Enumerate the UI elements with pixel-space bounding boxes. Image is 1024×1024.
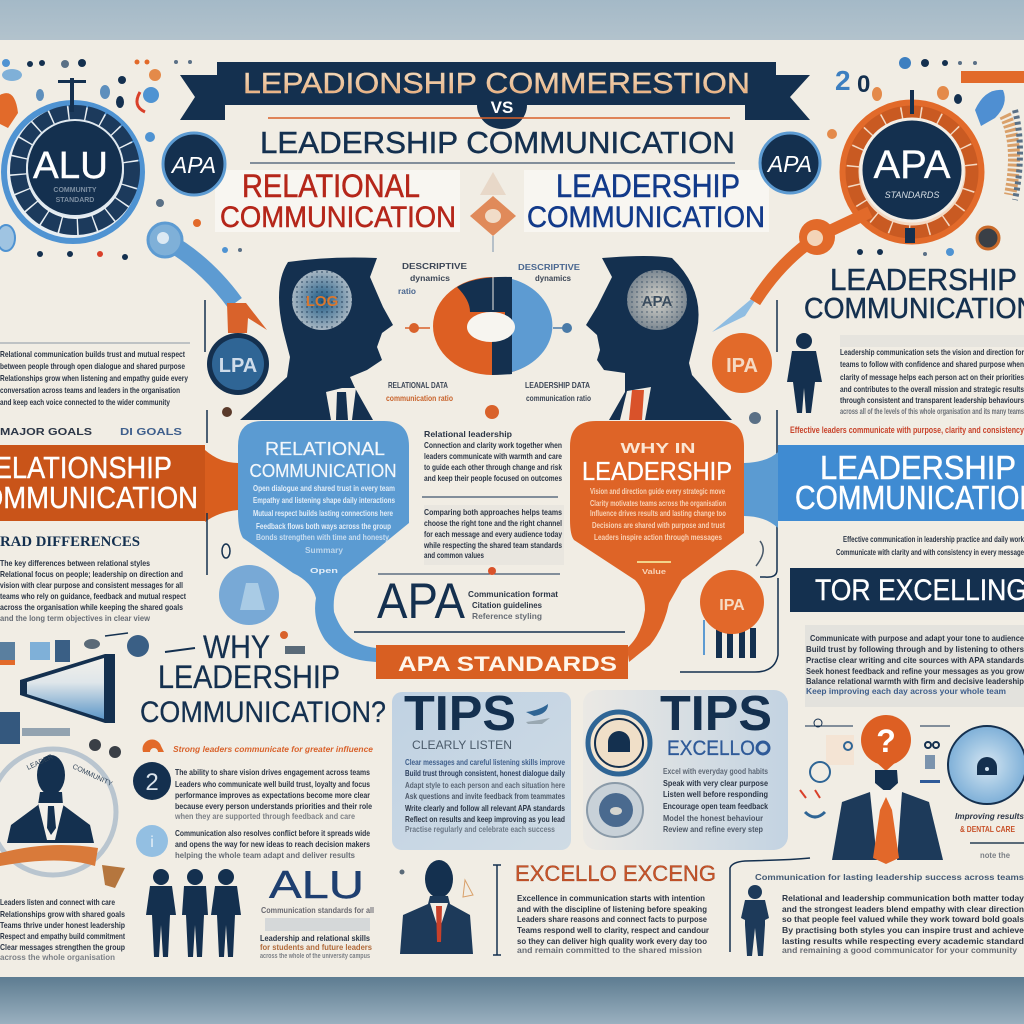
panel: right text <box>805 625 1024 707</box>
icon: orange disc with bars <box>680 410 778 672</box>
text block: centre lower: Comparing both approaches helps teams <box>424 507 562 517</box>
icon: standing person right <box>787 333 822 413</box>
text block: left differences: Relational focus on people; leadership on direction and <box>0 569 183 579</box>
labels around donut: ratio <box>398 287 416 296</box>
text block: bottom left: across the whole organisation <box>0 952 115 962</box>
text block: centre upper: Connection and clarity work together when <box>424 440 562 450</box>
labels around donut: communication ratio <box>526 394 591 403</box>
text block: right leadership <box>790 335 1024 435</box>
text block: left relational: MAJOR GOALS <box>0 427 92 438</box>
heading: relational communication red <box>215 168 460 234</box>
text block: reason two: performance improves as expectations become more clear <box>175 790 371 800</box>
text block: left differences: vision with clear purpose and consistent messages for all <box>0 580 183 590</box>
badge: right IPA disc: IPA <box>726 355 758 377</box>
icon: centre diamond <box>470 172 516 252</box>
icon: businessman with question mark <box>832 715 943 864</box>
silhouette: right head <box>586 256 732 420</box>
panel: tips left: Reflect on results and keep improving as you lead <box>405 814 565 824</box>
text block: reason two <box>174 767 372 821</box>
text block: reason three: helping the whole team adapt and deliver results <box>175 850 355 860</box>
brain icon right: APA <box>642 293 672 310</box>
text block: right small captions: note the <box>980 850 1010 860</box>
panel: tips left: TIPS <box>404 687 516 741</box>
text block: centre upper: Relational leadership <box>424 429 512 439</box>
banner: tor excelling <box>790 568 1024 612</box>
heading: leadership communication blue: LEADERSHIP <box>556 168 740 204</box>
heading: right leadership communication <box>804 262 1024 325</box>
banner: relationship communication <box>0 410 238 575</box>
vs text: VS <box>491 98 513 117</box>
badge: APA standards <box>843 90 981 243</box>
text block: excel <box>517 893 710 955</box>
text block: reason two: The ability to share vision drives engagement across teams <box>175 767 370 777</box>
heading: leadership communication blue: COMMUNICATION <box>527 201 765 234</box>
text block: left differences: and the long term objectives in clear view <box>0 613 150 623</box>
text block: centre lower: while respecting the shared team standards <box>423 540 562 550</box>
text block: right under banner <box>836 534 1024 557</box>
badge: leader portrait: LEADER <box>26 754 54 772</box>
heading: APA centre <box>377 573 558 629</box>
heading: excello exceng: EXCELLO EXCENG <box>515 861 716 886</box>
text block: ALU: across the whole of the university campus <box>260 953 370 960</box>
panel: tips right: Listen well before responding <box>663 789 768 799</box>
badge: left APA disc <box>207 333 269 395</box>
labels around donut: dynamics <box>410 274 451 283</box>
panel: tips right: Encourage open team feedback <box>663 801 768 811</box>
bubble: why in leadership: Value <box>642 569 666 576</box>
bubble: relational communication: COMMUNICATION <box>250 461 396 481</box>
panel: tips right: Review and refine every step <box>663 824 763 834</box>
badge: right IPA disc <box>712 333 772 393</box>
badge: APA standards: APA <box>873 143 951 187</box>
bubble: why in leadership: Decisions are shared with purpose and trust <box>592 520 725 530</box>
banner: leadership communication right <box>778 445 1024 521</box>
bubble: relational communication: Feedback flows both ways across the group <box>256 521 391 531</box>
text block: left differences <box>0 558 186 623</box>
text block: left relational: DI GOALS <box>120 427 182 438</box>
panel: tips right: EXCELLO <box>667 737 755 760</box>
text block: centre upper: leaders communicate with warmth and care <box>424 451 562 461</box>
labels around donut: DESCRIPTIVE <box>402 262 468 271</box>
icon: blue info circle <box>136 825 168 857</box>
text block: left differences: across the organisation while keeping the shared goals <box>0 602 183 612</box>
text block: ALU <box>260 905 374 960</box>
donut chart <box>405 277 572 375</box>
text block: bottom right: Communication for lasting leadership success across teams <box>755 872 1024 882</box>
panel: tips right: Model the honest behaviour <box>663 813 764 823</box>
heading: ALU bottom: ALU <box>269 864 364 907</box>
icons: scattered right top: 2 <box>835 65 851 96</box>
badge: APA small right <box>760 133 820 193</box>
text block: right small captions <box>955 811 1024 860</box>
text block: bottom right: so that people feel valued while they work toward bold goals <box>782 914 1024 924</box>
text block: centre lower: choose the right tone and the right channel <box>424 518 562 528</box>
text block: why orange header: Strong leaders communicate for greater influence <box>173 744 373 754</box>
heading: relational communication red: COMMUNICATION <box>220 201 456 234</box>
text block: centre lower <box>423 505 564 565</box>
labels around donut: LEADERSHIP DATA <box>525 381 590 390</box>
silhouette: left head <box>240 258 393 420</box>
badge: leader portrait: COMMUNITY <box>71 763 114 788</box>
heading: why leadership communication: COMMUNICATION? <box>140 696 386 729</box>
labels around donut: DESCRIPTIVE <box>518 263 581 272</box>
icons: scattered right top <box>827 57 1024 256</box>
heading: relational communication red: RELATIONAL <box>242 168 420 204</box>
text block: excel: Excellence in communication starts with intention <box>517 893 705 903</box>
bubble: why in leadership: Vision and direction guide every strategic move <box>590 486 725 496</box>
text block: bottom left: Leaders listen and connect with care <box>0 897 115 907</box>
banner: APA standards: APA STANDARDS <box>398 653 617 676</box>
badge: APA small left <box>163 133 225 195</box>
bubble: why in leadership: Clarity motivates teams across the organisation <box>590 498 726 508</box>
text block: left relational: Relationships grow when listening and empathy guide every <box>0 373 188 383</box>
bubble: why in leadership: WHY IN <box>620 440 696 457</box>
badge: APA standards: STANDARDS <box>885 190 939 200</box>
labels around donut: RELATIONAL DATA <box>388 381 448 390</box>
panel: tips right: TIPS <box>660 687 772 741</box>
heading: APA centre: APA <box>377 573 466 629</box>
text block: left differences: teams who rely on guidance, feedback and mutual respect <box>0 591 186 601</box>
icon: businessman with question mark: ? <box>876 723 896 759</box>
text block: left relational: conversation across teams and leaders in the organisation <box>0 385 180 395</box>
labels around donut <box>222 262 761 424</box>
text block: reason two: Leaders who communicate well build trust, loyalty and focus <box>175 779 370 789</box>
banner: leadership communication right: LEADERSHIP <box>820 449 1016 486</box>
heading: why leadership communication: LEADERSHIP <box>158 659 340 695</box>
panel: tips left: Ask questions and invite feedback from teammates <box>405 791 565 801</box>
text block: left relational: and keep each voice connected to the wider community <box>0 397 170 407</box>
text block: bottom left: Clear messages strengthen the group <box>0 942 125 952</box>
left icon row <box>0 631 305 665</box>
icon: businessman centre <box>400 860 501 955</box>
title ribbon <box>180 62 810 129</box>
brain icon right <box>627 270 687 330</box>
bubble: why in leadership: LEADERSHIP <box>582 456 732 486</box>
heading: why leadership communication: WHY <box>203 629 270 665</box>
icon: radar disc <box>948 726 1024 804</box>
bubble: relational communication: Bonds strengthen with time and honesty <box>256 532 389 542</box>
bubble: why in leadership <box>570 421 744 662</box>
text block: bottom left: Teams thrive under honest leadership <box>0 920 125 930</box>
text block: reason three: and opens the way for new ideas to reach decision makers <box>175 839 370 849</box>
text block: excel: Leaders share reasons and connect facts to purpose <box>517 914 707 924</box>
text block: reason two: when they are supported through feedback and care <box>174 811 355 821</box>
panel: right text: Keep improving each day across your whole team <box>806 686 1006 696</box>
text block: bottom right: Relational and leadership communication both matter today <box>782 893 1024 903</box>
heading: leadership communication blue <box>524 168 769 234</box>
badge: ALU: COMMUNITY <box>53 187 97 194</box>
bubble: relational communication: Open dialogue and shared trust in every team <box>253 483 395 493</box>
connector: right orange arm <box>712 212 870 352</box>
heading: APA centre: Reference styling <box>472 611 542 621</box>
text block: bottom left: Respect and empathy build commitment <box>0 931 125 941</box>
bubble: relational communication: Summary <box>305 545 343 555</box>
text block: reason two: because every person understands priorities and their role <box>175 801 372 811</box>
icon: orange disc with bars: IPA <box>719 597 745 614</box>
text block: reason three <box>175 828 370 860</box>
bubble: why in leadership: Leaders inspire action through messages <box>594 532 722 542</box>
bubble: why in leadership: Influence drives results and lasting change too <box>590 508 726 518</box>
heading: APA centre: Citation guidelines <box>472 600 542 610</box>
panel: tips left: Build trust through consistent, honest dialogue daily <box>405 768 565 778</box>
text block: excel: and remain committed to the shared mission <box>517 945 702 955</box>
icon: ring lens <box>588 712 650 774</box>
text block: left relational: between people through open dialogue and shared purpose <box>0 361 185 371</box>
text block: excel: and with the discipline of listening before speaking <box>517 904 707 914</box>
icon: blue info circle: i <box>150 834 154 851</box>
panel: tips left: Practise regularly and celebrate each success <box>405 824 555 834</box>
badge: left APA disc: LPA <box>219 355 257 377</box>
labels around donut: dynamics <box>535 274 572 283</box>
heading: why leadership communication <box>140 629 386 729</box>
text block: left relational: Relational communication builds trust and mutual respect <box>0 349 185 359</box>
connector: left blue arm <box>148 223 267 352</box>
title text: LEPADIONSHIP COMMERESTION <box>243 68 750 100</box>
icon: standing person in frame <box>730 858 810 956</box>
text block: centre upper <box>424 429 562 483</box>
brain icon left <box>292 270 352 330</box>
brain icon left: LOG <box>306 293 338 310</box>
panel: tips left: Write clearly and follow all relevant APA standards <box>405 803 565 813</box>
text block: why orange header <box>143 740 373 754</box>
text block: bottom left: Relationships grow with shared goals <box>0 909 125 919</box>
text block: excel: Teams respond well to clarity, respect and candour <box>517 925 710 935</box>
text block: excel: so they can deliver high quality work every day too <box>517 936 707 946</box>
text block: left relational <box>0 343 190 438</box>
bubble: relational communication: RELATIONAL <box>265 439 385 459</box>
badge: ALU: STANDARD <box>56 197 94 204</box>
connector: blue tab right <box>744 452 778 528</box>
panel: tips right: Excel with everyday good habits <box>663 766 768 776</box>
icon: grey lens <box>587 783 643 837</box>
heading: differences: RAD DIFFERENCES <box>0 534 140 550</box>
text block: bottom right: and the strongest leaders blend empathy with clear direction <box>782 904 1024 914</box>
panel: tips right <box>583 687 788 850</box>
heading: right leadership communication: LEADERSHIP <box>830 262 1017 297</box>
badge: APA small left: APA <box>170 152 216 178</box>
text block: bottom right: and remaining a good communicator for your community <box>782 945 1017 955</box>
text block: reason three: Communication also resolves conflict before it spreads wide <box>175 828 370 838</box>
bubble: relational communication: Mutual respect builds lasting connections here <box>253 508 393 518</box>
icons: scattered left top <box>0 59 242 260</box>
text block: ALU: Communication standards for all <box>261 905 374 915</box>
bubble: relational communication <box>238 421 409 662</box>
text block: centre lower: for each message and every audience today <box>424 529 562 539</box>
icon: number 2 <box>133 762 171 800</box>
icons: scattered right top: 0 <box>857 71 870 98</box>
icon: blue disc <box>219 544 279 625</box>
badge: leader portrait <box>0 749 125 888</box>
text block: ALU: for students and future leaders <box>260 943 373 952</box>
text block: ALU: Leadership and relational skills <box>260 933 370 943</box>
right icons around businessman <box>800 719 950 817</box>
panel: tips left: CLEARLY LISTEN <box>412 738 512 752</box>
text block: bottom right: By practising both styles you can inspire trust and achieve <box>782 925 1024 935</box>
panel: tips right: Speak with very clear purpose <box>663 778 768 788</box>
text block: bottom left <box>0 897 125 962</box>
banner: APA standards <box>376 645 628 679</box>
badge: ALU: ALU <box>33 145 108 187</box>
text block: bottom right <box>755 872 1024 955</box>
bubble: relational communication: Empathy and listening shape daily interactions <box>253 495 395 505</box>
panel: tips left: Adapt style to each person and each situation here <box>405 780 565 790</box>
text block: bottom right: lasting results while respecting every academic standard <box>782 936 1024 946</box>
text block: centre upper: and keep their people focused on outcomes <box>424 473 562 483</box>
icon: number 2: 2 <box>145 769 159 796</box>
panel: tips left: Clear messages and careful listening skills improve <box>405 757 565 767</box>
icon: megaphone <box>0 654 121 758</box>
labels around donut: communication ratio <box>386 394 453 403</box>
heading: APA centre: Communication format <box>468 589 558 599</box>
text block: centre upper: to guide each other through change and risk <box>424 462 562 472</box>
badge: ALU <box>4 78 142 241</box>
panel: tips left <box>392 687 571 850</box>
heading: leadership communication: LEADERSHIP COMMUNICATION <box>260 125 735 160</box>
bubble: relational communication: Open <box>310 568 338 575</box>
text block: left differences: The key differences between relational styles <box>0 558 150 568</box>
text block: centre lower: and common values <box>424 550 484 560</box>
badge: APA small right: APA <box>766 151 812 177</box>
icon: three people <box>146 869 241 957</box>
